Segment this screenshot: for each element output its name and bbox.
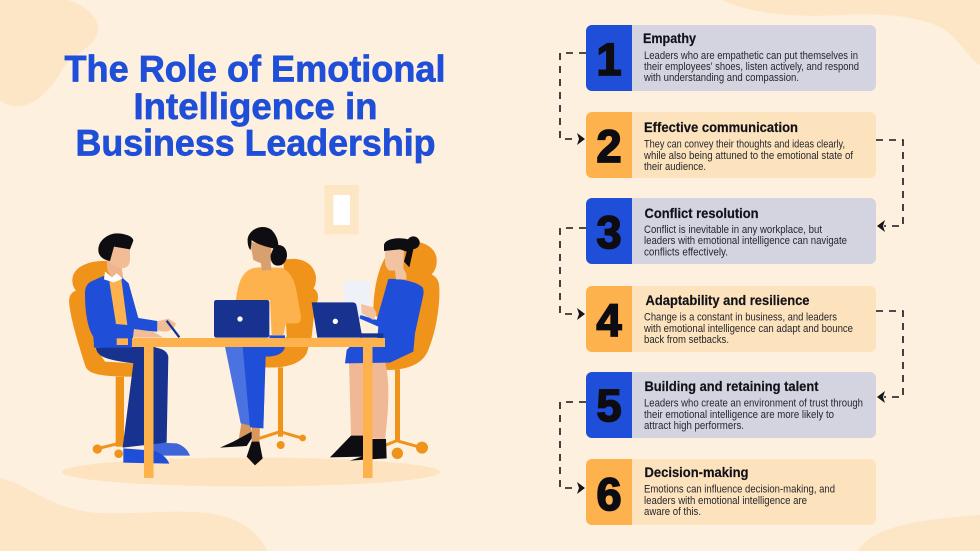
connector: 4 to 5 (876, 311, 903, 403)
panel: 6 Decision-making: leaders with emotional intelligence are (644, 495, 807, 507)
panel: 3 Conflict resolution: Conflict is inevitable in any workplace, but (644, 224, 822, 236)
panel: 4 Adaptability and resilience: Change is a constant in business, and leaders (644, 312, 837, 324)
floor shadow (62, 458, 440, 486)
panel: 4 Adaptability and resilience (586, 286, 876, 352)
table (132, 338, 385, 478)
panel: 5 Building and retaining talent: Building and retaining talent (644, 378, 819, 394)
panel: 3 Conflict resolution: Conflict resolution (644, 205, 758, 221)
panel: 4 Adaptability and resilience: 4 (596, 295, 622, 346)
connector: 2 to 3 (876, 140, 903, 232)
title: Business Leadership (76, 123, 436, 164)
panel: 3 Conflict resolution: leaders with emotional intelligence can navigate (644, 235, 847, 247)
panel: 6 Decision-making: Emotions can influence decision-making, and (644, 484, 835, 496)
title (64, 49, 446, 164)
panel: 1 Empathy: Empathy (643, 30, 696, 46)
panel: 1 Empathy: with understanding and compassion. (643, 72, 799, 84)
panel: 2 Effective communication: Effective communication (644, 119, 798, 135)
connector: 5 to 6 (560, 402, 586, 494)
panel: 4 Adaptability and resilience: Adaptability and resilience (646, 292, 810, 308)
woman in yellow (214, 227, 318, 465)
panel: 1 Empathy: Leaders who are empathetic can put themselves in (644, 50, 858, 62)
panel: 3 Conflict resolution: 3 (596, 207, 622, 258)
panel: 2 Effective communication: They can convey their thoughts and ideas clearly, (644, 138, 845, 150)
panel: 4 Adaptability and resilience: back from setbacks. (644, 334, 729, 346)
man seated (69, 233, 190, 464)
panel: 2 Effective communication: while also being attuned to the emotional state of (643, 150, 854, 162)
panel: 5 Building and retaining talent: attract high performers. (644, 420, 744, 432)
illustration: team meeting at a table (62, 185, 440, 487)
panel: 1 Empathy: 1 (596, 34, 622, 85)
woman in blue (312, 236, 439, 461)
panel: 5 Building and retaining talent: 5 (596, 380, 622, 431)
panel: 2 Effective communication (586, 112, 876, 178)
panel: 6 Decision-making: 6 (596, 469, 622, 520)
connector: 1 to 2 (560, 53, 586, 145)
panel: 6 Decision-making: aware of this. (644, 506, 701, 518)
panel: 2 Effective communication: 2 (596, 121, 622, 172)
panel: 5 Building and retaining talent: Leaders who create an environment of trust through (644, 398, 863, 410)
panel: 4 Adaptability and resilience: with emotional intelligence can adapt and bounce (643, 323, 853, 335)
panel: 5 Building and retaining talent (586, 372, 876, 438)
panel: 2 Effective communication: their audience. (644, 161, 706, 173)
panel: 6 Decision-making: Decision-making (644, 464, 748, 480)
panel: 3 Conflict resolution (586, 198, 876, 264)
connector: 3 to 4 (560, 228, 586, 320)
panel: 6 Decision-making (586, 459, 876, 525)
title: The Role of Emotional (64, 49, 446, 90)
title: Intelligence in (134, 86, 378, 127)
panel: 1 Empathy: their employees' shoes, listen actively, and respond (644, 61, 859, 73)
panel: 5 Building and retaining talent: their emotional intelligence are more likely to (644, 409, 834, 421)
panel: 1 Empathy (586, 25, 876, 91)
panel: 3 Conflict resolution: conflicts effectively. (644, 246, 728, 258)
wall frame (324, 185, 359, 234)
